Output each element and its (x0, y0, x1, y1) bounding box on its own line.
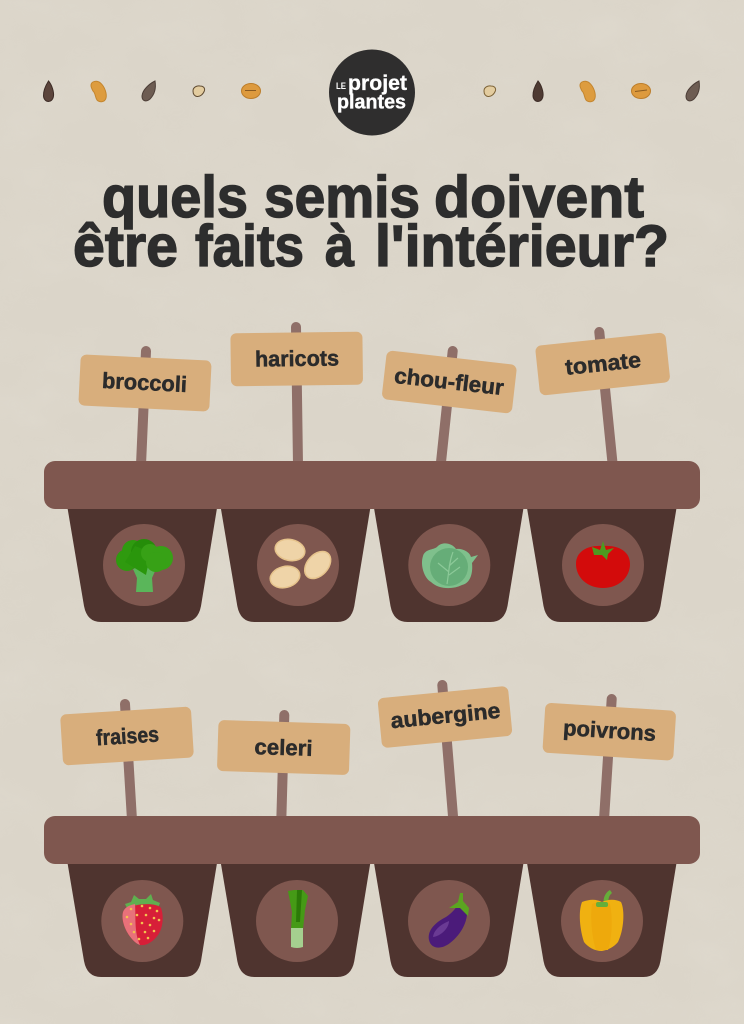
icon: striped seed (142, 81, 155, 101)
logo: plantes (337, 92, 406, 114)
post: celeri (281, 715, 284, 820)
sign: aubergine: aubergine (389, 698, 501, 733)
seeds row: left (43, 81, 260, 102)
shelf rim (44, 461, 700, 509)
title: être (73, 214, 178, 279)
icon: small seed (193, 86, 205, 97)
pot 4 (526, 860, 677, 977)
title: quels (102, 165, 248, 230)
shelf rim (44, 816, 700, 864)
title: à (325, 214, 355, 279)
sign: poivrons: poivrons (562, 715, 657, 746)
post: aubergine (442, 685, 453, 820)
pot 2 (220, 505, 371, 622)
icon: oval seed (632, 84, 650, 98)
icon: celery (288, 890, 308, 948)
title: doivent (434, 165, 644, 230)
logo (329, 50, 415, 136)
pot 3 (374, 860, 524, 977)
icon: small seed (484, 86, 496, 97)
seeds row: right (484, 81, 699, 102)
sign: tomate: tomate (564, 347, 642, 380)
title: faits (195, 214, 304, 279)
title (73, 165, 669, 279)
icon: bean (91, 81, 106, 102)
icon: cabbage (422, 543, 478, 588)
title: l'intérieur? (375, 214, 669, 279)
sign: broccoli (78, 354, 212, 412)
veg circle 3 (408, 524, 490, 606)
icon: bean (580, 81, 595, 102)
veg circle 4 (562, 524, 644, 606)
icon: yellow pepper (580, 890, 623, 951)
sign: celeri (217, 720, 350, 775)
sign: aubergine (377, 686, 513, 748)
sign: fraises: fraises (95, 722, 160, 750)
sign: broccoli: broccoli (101, 368, 188, 397)
panel: top planter (44, 327, 700, 622)
icon: striped seed (686, 81, 699, 101)
panel: bottom planter (44, 685, 700, 977)
post: tomate (599, 332, 613, 465)
post: haricots (296, 327, 298, 465)
icon: beans (268, 537, 336, 591)
icon: dark seed (43, 81, 54, 102)
post: fraises (125, 704, 132, 820)
veg circle 3 (408, 880, 490, 962)
post: poivrons (604, 699, 612, 820)
icon: dark seed (533, 81, 543, 102)
pot 1 (67, 505, 218, 622)
logo: projet (348, 71, 407, 95)
sign: celeri: celeri (254, 734, 313, 761)
icon: eggplant (429, 893, 469, 948)
veg circle 2 (256, 880, 338, 962)
veg circle 1 (103, 524, 185, 606)
icon: broccoli (116, 539, 173, 592)
icon: tomato (576, 541, 630, 588)
pot 4 (526, 505, 677, 622)
sign: tomate (535, 332, 670, 396)
icon: strawberry (122, 894, 163, 945)
logo: LE (336, 81, 346, 92)
sign: chou-fleur (381, 350, 517, 414)
post: broccoli (141, 351, 146, 465)
pot 1 (67, 860, 218, 977)
post: chou-fleur (441, 351, 453, 465)
sign: fraises (60, 706, 194, 766)
veg circle 1 (101, 880, 183, 962)
veg circle 4 (561, 880, 643, 962)
title: semis (264, 165, 420, 230)
pot 2 (220, 860, 371, 977)
sign: poivrons (542, 703, 676, 761)
icon: oval seed (242, 84, 260, 98)
sign: haricots (230, 332, 363, 386)
pot 3 (374, 505, 524, 622)
veg circle 2 (257, 524, 339, 606)
sign: haricots: haricots (255, 345, 339, 372)
sign: chou-fleur: chou-fleur (393, 363, 506, 400)
